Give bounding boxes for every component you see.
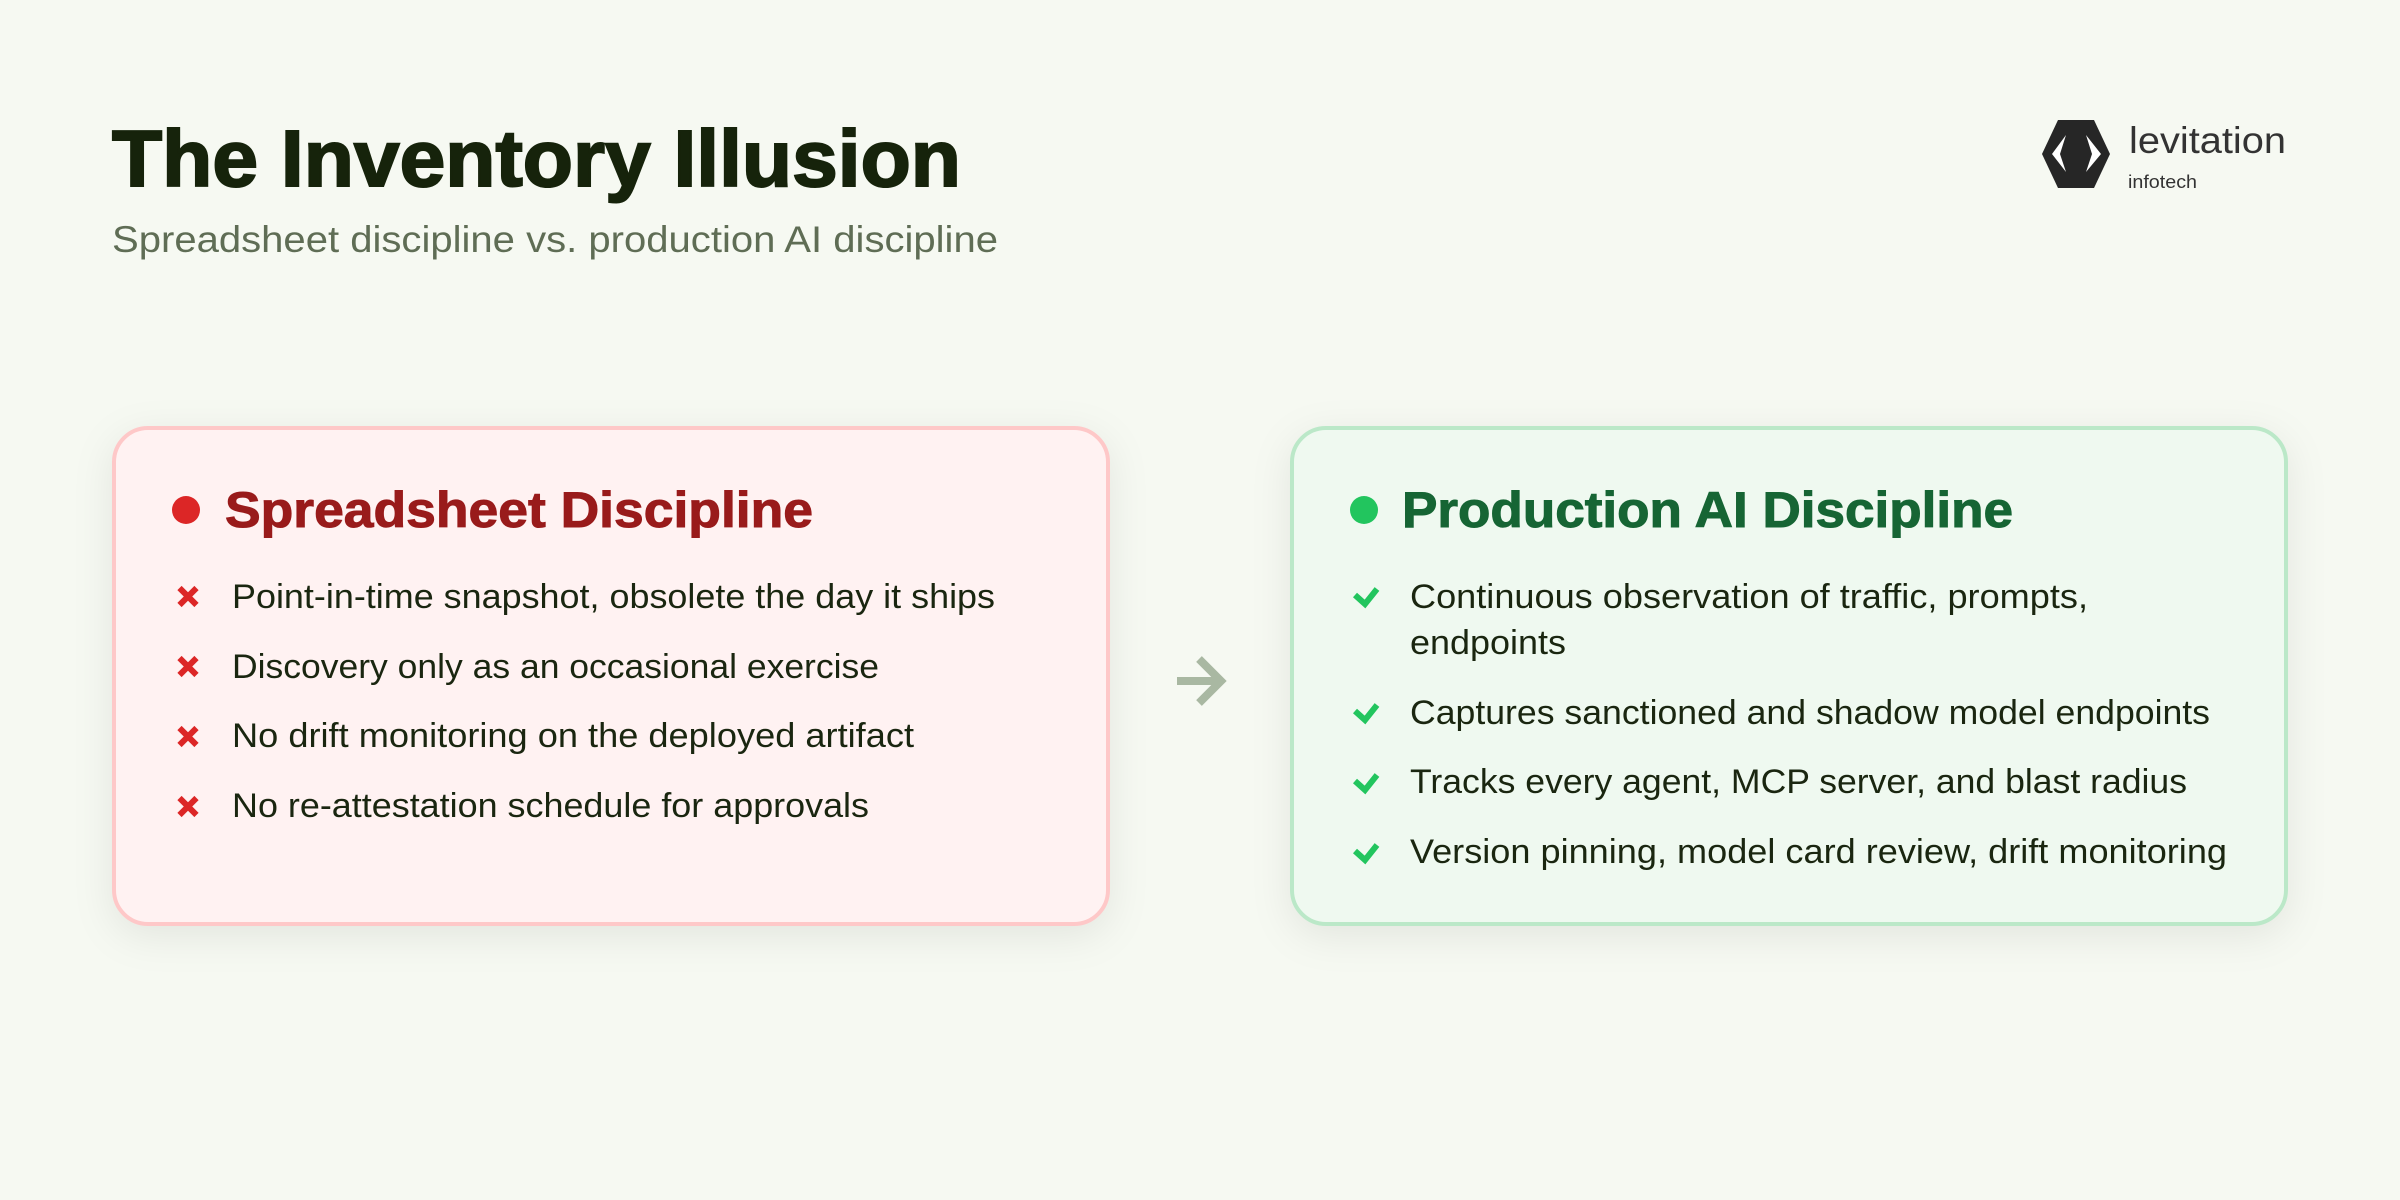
heading: spreadsheet discipline: Spreadsheet Discipline	[225, 482, 813, 538]
item: version pinning: Version pinning, model card review, drift monitoring	[1410, 833, 2227, 871]
logo wordmark: levitation	[2129, 120, 2286, 161]
status dot: green	[1350, 496, 1378, 524]
panel: spreadsheet discipline	[114, 428, 1108, 924]
panel: production AI discipline	[1292, 428, 2286, 924]
title: The Inventory Illusion	[112, 114, 961, 203]
item: no re-attestation: No re-attestation schedule for approvals	[232, 787, 869, 825]
panel background	[114, 428, 1108, 924]
item: discovery only: Discovery only as an occasional exercise	[232, 648, 879, 686]
item: no drift monitoring: No drift monitoring on the deployed artifact	[232, 717, 915, 755]
subtitle: Spreadsheet discipline vs. production AI discipline	[112, 219, 998, 260]
icon: hexagon logo mark	[2042, 120, 2110, 188]
arrow	[1177, 659, 1221, 703]
item: tracks agents: Tracks every agent, MCP server, and blast radius	[1410, 763, 2187, 801]
status dot: red	[172, 496, 200, 524]
logo tagline: infotech	[2128, 172, 2197, 192]
item: continuous observation: Continuous observation of traffic, prompts,	[1410, 578, 2088, 616]
item: point-in-time snapshot: Point-in-time snapshot, obsolete the day it ships	[232, 578, 995, 616]
logo: levitation infotech	[2042, 120, 2286, 192]
item: captures endpoints: Captures sanctioned and shadow model endpoints	[1410, 694, 2210, 732]
item: continuous observation	[1355, 578, 2088, 662]
item: continuous observation: endpoints	[1410, 624, 1566, 662]
heading: production AI discipline: Production AI Discipline	[1402, 482, 2013, 538]
panel background	[1292, 428, 2286, 924]
